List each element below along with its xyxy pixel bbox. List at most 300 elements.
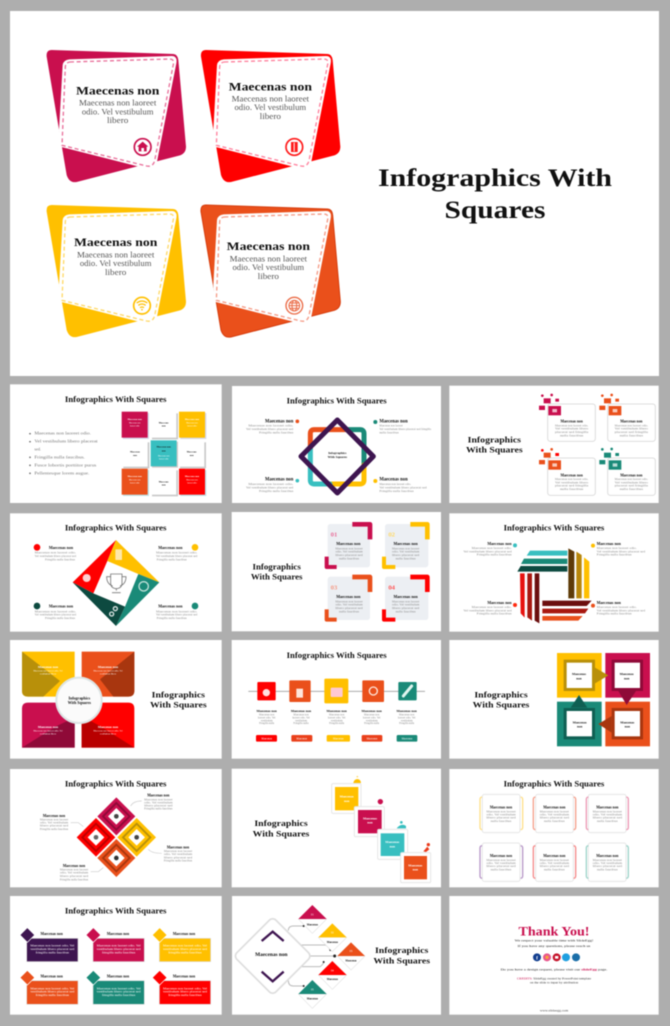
bullet list: Pellentesque lorem augue. — [34, 471, 89, 476]
icon: target — [139, 582, 148, 591]
small diamond: orange: Maecenas — [345, 960, 357, 963]
panel background — [232, 512, 441, 631]
labels: Maecenas non — [158, 545, 183, 550]
panel background — [449, 896, 659, 1015]
numbered card 04: nulla faucibus — [396, 610, 416, 613]
nested squares: Maecenas — [573, 720, 587, 724]
heading: With Squares — [473, 700, 530, 710]
large diamond — [234, 917, 312, 995]
box 02: fringilla nulla faucibus — [102, 951, 135, 954]
staircase cards — [332, 784, 431, 883]
card: yellow wifi: odio. Vel vestibulum — [80, 259, 152, 268]
labels: Maecenas non laoreet odio. — [472, 606, 512, 609]
numbered card 03: libero placerat sed — [335, 607, 364, 610]
cards and icons: placerat sed fringilla — [555, 485, 590, 488]
label: top right: nulla faucibus — [379, 432, 399, 435]
panel background — [232, 896, 441, 1015]
box 01: Maecenas non — [41, 932, 63, 936]
3x3 square grid: Maecenas non — [129, 423, 140, 425]
nested squares: Maecenas — [572, 672, 587, 676]
timeline labels: Fringilla nulla — [293, 722, 309, 725]
box 06 — [152, 970, 211, 1004]
quadrants: Maecenas non — [38, 725, 58, 729]
box 06: Maecenas non laoreet odio. Vel — [163, 987, 207, 990]
panel background — [449, 769, 659, 887]
panel background — [449, 513, 659, 632]
card: orange globe: Maecenas non — [227, 239, 310, 253]
heading: With Squares — [373, 956, 431, 966]
labels: Maecenas non laoreet odio. — [156, 552, 198, 555]
bracket card: pale yellow — [480, 794, 523, 833]
3x3 square grid: laoreet odio — [130, 483, 139, 485]
callouts: odio. Vel vestibulum — [40, 822, 69, 825]
cards and icons: Vel vestibulum libero — [555, 481, 589, 484]
3x3 square grid: Maecenas non — [158, 456, 169, 458]
small diamond: yellow — [318, 923, 347, 952]
bracket card: purple: Maecenas non laoreet — [486, 859, 516, 862]
label: bottom right: Fringilla nulla faucibus — [379, 490, 414, 493]
small diamond: red: Maecenas — [327, 978, 338, 981]
icon: trophy — [107, 574, 126, 593]
numbered card 04: Maecenas non — [394, 594, 419, 599]
numbered card 04: odio. Vel vestibulum — [392, 604, 420, 607]
bracket card: teal: Maecenas non — [596, 854, 618, 858]
woven stripes — [517, 548, 592, 623]
numbered card 02 — [384, 524, 428, 567]
panel: four cards with pixel icons — [449, 386, 659, 503]
labels: Fringilla nulla faucibus — [157, 617, 187, 620]
cards and icons — [539, 394, 655, 495]
panel background — [449, 640, 659, 759]
heading: Infographics With Squares — [287, 650, 387, 660]
box 03: vestibulum libero placerat sed — [163, 948, 208, 951]
card: yellow wifi: libero — [105, 268, 126, 277]
label: top right — [373, 419, 432, 435]
panel: branching diamonds — [232, 896, 441, 1015]
label: bottom left — [246, 478, 299, 493]
timeline labels: laoreet odio. Vel — [292, 717, 310, 720]
main slide background — [10, 11, 659, 376]
bullet list — [29, 431, 99, 476]
large diamond: Maecenas non — [255, 952, 288, 958]
icon: door — [286, 139, 303, 155]
cards and icons: Maecenas non laoreet odio. — [615, 478, 648, 481]
3x3 square grid: Maecenas — [159, 480, 169, 483]
numbered card 01: Maecenas non — [336, 541, 361, 546]
3x3 square grid: Maecenas non — [157, 446, 171, 449]
callouts: libero placerat sed — [40, 825, 69, 828]
bracket card: salmon — [533, 794, 576, 833]
timeline line and arrows — [248, 690, 425, 693]
timeline labels: laoreet odio. Vel — [363, 717, 381, 720]
labels: Fringilla nulla faucibus — [45, 558, 75, 561]
3x3 square grid: non — [133, 454, 138, 457]
timeline labels: Maecenas non — [362, 709, 382, 713]
numbered card 04 — [384, 577, 428, 620]
labels: Maecenas non — [597, 541, 622, 546]
bracket card: pale yellow: odio. Vel vestibulum — [486, 814, 517, 817]
heading: Infographics With Squares — [287, 395, 387, 405]
3x3 square grid: Maecenas non — [128, 418, 142, 421]
panel background — [449, 386, 659, 503]
callouts: odio. Vel vestibulum — [60, 872, 89, 875]
icon: wifi — [134, 297, 150, 314]
box 03: fringilla nulla faucibus — [168, 951, 202, 954]
timeline labels: Maecenas non — [291, 709, 311, 713]
box 04: fringilla nulla faucibus — [36, 994, 69, 997]
bullet list: Fringilla nulla faucibus. — [34, 455, 85, 460]
card: orange globe — [201, 205, 340, 337]
box 03 — [152, 928, 211, 962]
timeline labels: laoreet odio. Vel — [258, 717, 276, 720]
labels: Vel vestibulum libero placerat sed — [35, 614, 77, 617]
numbered card 04: libero placerat sed — [392, 607, 420, 610]
credits: on the slide to input by attribution — [530, 980, 579, 984]
heading: With Squares — [251, 572, 303, 582]
box 06: Maecenas non — [173, 974, 195, 978]
panel: numbered cards — [232, 512, 441, 631]
labels: Fringilla nulla faucibus — [157, 558, 187, 561]
cards and icons: nulla faucibus — [620, 488, 643, 491]
card: red door: Maecenas non — [229, 80, 312, 94]
panel: six numbered boxes — [10, 896, 222, 1015]
3x3 square grid — [122, 412, 206, 496]
3x3 square grid: Maecenas — [187, 451, 197, 454]
center circle: With Squares — [68, 700, 91, 705]
panel background — [232, 386, 441, 503]
nested squares: non — [576, 676, 582, 680]
numbered card 02: 02 — [388, 532, 396, 539]
bracket card: pink: libero placerat sed — [593, 817, 623, 820]
heading: Infographics With Squares — [504, 523, 605, 533]
panel: four quadrants with circle — [10, 640, 222, 759]
timeline labels: Maecenas non — [259, 714, 275, 717]
labels: Fringilla nulla faucibus — [477, 554, 512, 557]
label: bottom left: Maecenas non laoreet odio. — [248, 483, 294, 486]
timeline labels: vestibulum — [401, 719, 413, 722]
3x3 square grid: laoreet odio — [159, 459, 168, 461]
bracket card: teal: Maecenas non laoreet — [593, 859, 622, 862]
social icons: f — [536, 955, 538, 961]
social icons — [533, 953, 580, 961]
callouts: Fringilla nulla faucibus — [164, 860, 192, 863]
labels: Maecenas non laoreet odio. — [472, 547, 512, 550]
bracket card: red — [533, 843, 576, 881]
quadrants: Maecenas non laoreet odio. Vel — [33, 670, 63, 673]
bracket card: pink: nulla faucibus — [597, 820, 618, 823]
quadrants: Maecenas non — [98, 665, 118, 669]
bullet list: Fusce lobortis porttitor purus — [34, 463, 97, 468]
icon: gears — [110, 607, 117, 616]
callouts: Maecenas non laoreet — [60, 869, 88, 872]
thank you title: Thank You! — [518, 925, 589, 939]
small diamond: green: 05 — [311, 989, 314, 992]
box 04: vestibulum libero placerat sed — [30, 991, 75, 994]
labels: Vel vestibulum libero placerat sed — [463, 609, 513, 612]
bracket card: red: odio. Vel vestibulum — [540, 862, 570, 865]
timeline pills: Maecenas — [296, 737, 307, 740]
icon: home — [134, 139, 151, 155]
callouts: Maecenas non laoreet — [144, 798, 173, 801]
3x3 square grid: laoreet odio — [187, 426, 197, 428]
label: top right: Maecenas non laoreet — [379, 425, 403, 428]
bracket card: purple: odio. Vel vestibulum — [486, 862, 517, 865]
numbered card 03: Maecenas non — [336, 594, 361, 599]
box 01: fringilla nulla faucibus — [36, 951, 69, 954]
cards and icons: Vel vestibulum libero — [615, 428, 649, 431]
numbered card 01: odio. Vel vestibulum — [335, 551, 364, 554]
card: crimson home: odio. Vel vestibulum — [82, 107, 154, 116]
heading — [473, 689, 530, 710]
quadrants: vestibulum libero — [100, 733, 117, 736]
panel: four diamonds — [10, 769, 222, 887]
staircase cards: non — [390, 844, 395, 848]
bracket card: teal: nulla faucibus — [597, 868, 618, 871]
timeline pills: Maecenas — [402, 737, 412, 740]
box 05: Maecenas non — [107, 974, 129, 978]
3x3 square grid: Maecenas non — [185, 418, 200, 421]
numbered card 01: libero placerat sed — [335, 554, 364, 557]
panel background — [232, 769, 441, 887]
card: orange globe: libero — [258, 272, 279, 281]
cards and icons: Maecenas non laoreet odio. — [615, 424, 648, 427]
timeline labels: Maecenas non — [293, 714, 309, 717]
labels: Maecenas non — [158, 604, 183, 609]
bracket card: red: nulla faucibus — [544, 868, 565, 871]
labels: Vel vestibulum libero placerat sed — [463, 550, 513, 553]
connectors — [288, 925, 336, 987]
labels: Maecenas non laoreet odio. — [597, 606, 637, 609]
heading: Infographics With Squares — [65, 523, 167, 533]
labels: Maecenas non — [597, 600, 622, 605]
diamond cluster — [77, 797, 156, 877]
bracket card: pink — [586, 794, 628, 833]
numbered card 02: nulla faucibus — [396, 557, 416, 560]
bullet list: Maecenas non laoreet odio. — [34, 431, 91, 436]
card: red door: odio. Vel vestibulum — [234, 103, 307, 112]
interlocked square diagram: With Squares — [328, 455, 348, 459]
box 06: fringilla nulla faucibus — [168, 994, 202, 997]
panel: interlocked squares — [232, 386, 441, 503]
bracket card: teal — [586, 843, 628, 881]
small diamond: crimson — [298, 905, 327, 933]
callouts: Maecenas non — [43, 814, 65, 818]
bracket card: teal: libero placerat sed — [593, 865, 623, 868]
small diamond: red — [318, 961, 347, 989]
panel: main slide — [10, 11, 659, 376]
panel background — [10, 384, 222, 503]
bracket card: salmon: Maecenas non laoreet — [540, 811, 569, 814]
card: orange globe: Maecenas non laoreet — [230, 254, 308, 263]
bracket card: red: libero placerat sed — [540, 865, 570, 868]
labels: Vel vestibulum libero placerat sed — [35, 555, 77, 558]
heading: With Squares — [150, 700, 207, 710]
timeline labels: Maecenas non — [399, 714, 415, 717]
box 02: Maecenas non — [107, 932, 129, 936]
quadrants — [22, 652, 134, 748]
bracket card: pink: Maecenas non — [596, 806, 618, 810]
nested squares: Maecenas — [620, 720, 635, 724]
icon: head — [83, 574, 91, 582]
cards and icons: nulla faucibus — [560, 488, 583, 491]
label: bottom right: Maecenas non laoreet odio. — [379, 483, 411, 486]
cards and icons: placerat sed fringilla — [615, 431, 649, 434]
quadrants: vestibulum libero — [40, 673, 57, 676]
numbered card 02: libero placerat sed — [392, 554, 420, 557]
credits: CREDITS: SlideEgg created by PowerPoint template — [517, 977, 592, 981]
panel: grid of squares — [10, 384, 222, 503]
bracket card: pale yellow: libero placerat sed — [486, 817, 517, 820]
panel: timeline icons — [232, 640, 441, 759]
icon: globe — [286, 297, 303, 314]
heading: Infographics — [254, 818, 308, 828]
design request line: Do you have a design request, please visit our slideEgg page. — [501, 968, 608, 973]
labels: Maecenas non laoreet odio. — [597, 547, 637, 550]
heading: Infographics — [152, 689, 206, 699]
bracket card: pale yellow: Maecenas non laoreet — [486, 811, 516, 814]
card: crimson home: libero — [107, 116, 128, 125]
heading — [150, 689, 207, 710]
heading: Infographics — [375, 945, 429, 955]
box 04 — [20, 970, 78, 1004]
label: top left: Fringilla nulla faucibus — [259, 432, 293, 435]
cards and icons: Maecenas non laoreet odio. — [555, 478, 589, 481]
panel background — [232, 640, 441, 759]
staircase cards: Maecenas — [385, 840, 400, 844]
timeline labels — [257, 709, 417, 725]
3x3 square grid: Maecenas non — [185, 475, 200, 478]
panel background — [10, 513, 222, 632]
timeline labels: Maecenas non — [397, 709, 417, 713]
numbered card 01: Maecenas non laoreet — [335, 547, 363, 550]
website: www.slideegg.com — [540, 1009, 569, 1013]
3x3 square grid: Maecenas — [159, 421, 169, 424]
bracket card: purple: libero placerat sed — [486, 865, 517, 868]
box 01: vestibulum libero placerat sed — [30, 948, 75, 951]
numbered card 04: 04 — [388, 584, 396, 591]
staircase icons — [353, 776, 430, 852]
panel: staircase squares — [232, 769, 441, 887]
timeline labels: vestibulum — [366, 719, 378, 722]
cards and icons: nulla faucibus — [620, 434, 643, 437]
label: top left: Vel vestibulum libero placerat sed — [246, 428, 294, 431]
heading: With Squares — [466, 445, 523, 455]
box 06: vestibulum libero placerat sed — [163, 991, 208, 994]
heading: Infographics — [468, 434, 522, 444]
callouts: Fringilla nulla faucibus — [60, 878, 88, 881]
callouts: Maecenas non laoreet — [40, 819, 68, 822]
timeline labels: Fringilla nulla — [329, 722, 345, 725]
box 01: Maecenas non laoreet odio. Vel — [30, 945, 75, 948]
cards and icons: Maecenas non — [620, 473, 642, 477]
heading: Infographics With Squares — [65, 778, 167, 788]
small diamond: green: Maecenas — [307, 997, 318, 1000]
bullet list: sed. — [34, 447, 41, 452]
cards and icons: placerat sed fringilla — [615, 485, 649, 488]
card: yellow wifi — [47, 205, 186, 337]
numbered card 03: odio. Vel vestibulum — [335, 604, 364, 607]
bracket card: pale yellow: nulla faucibus — [491, 820, 511, 823]
labels: Maecenas non — [49, 545, 74, 550]
cards and icons: nulla faucibus — [560, 434, 583, 437]
interlocked square diagram: Infographics — [328, 451, 347, 455]
heading — [466, 434, 523, 455]
heading — [373, 945, 431, 966]
card: red door: Maecenas non laoreet — [232, 94, 310, 103]
icon: document — [115, 549, 122, 560]
panel background — [10, 769, 222, 887]
labels: Maecenas non — [49, 604, 74, 609]
labels — [463, 541, 646, 616]
labels: Maecenas non laoreet odio. — [35, 552, 76, 555]
callouts: odio. Vel vestibulum — [144, 801, 174, 804]
nested squares — [557, 653, 650, 746]
numbered card 04: Maecenas non laoreet — [392, 600, 420, 603]
staircase cards: Maecenas — [408, 863, 423, 867]
small diamond: yellow: Maecenas — [327, 941, 338, 944]
timeline labels: Maecenas non — [329, 714, 345, 717]
cards and icons: Vel vestibulum libero — [555, 428, 589, 431]
quadrants: Maecenas non — [98, 725, 118, 729]
label: bottom left: Vel vestibulum libero placerat sed — [246, 486, 294, 489]
label: top left: Maecenas non laoreet odio. — [248, 425, 294, 428]
labels: Maecenas non — [487, 541, 512, 546]
panel background — [10, 896, 222, 1015]
bullet list: Vel vestibulum libero placerat — [34, 439, 99, 444]
numbered card 03: Maecenas non laoreet — [335, 600, 363, 603]
numbered card 03: nulla faucibus — [339, 610, 359, 613]
box 05: Maecenas non laoreet odio. Vel — [97, 987, 141, 990]
label: bottom left: Fringilla nulla faucibus — [259, 490, 293, 493]
labels: Maecenas non — [487, 600, 512, 605]
bracket card: teal: odio. Vel vestibulum — [593, 862, 623, 865]
labels: Maecenas non laoreet odio. — [35, 610, 76, 613]
staircase cards: Maecenas — [363, 816, 378, 820]
label: top right: Vel vestibulum libero placerat sed fringilla — [379, 428, 432, 431]
bracket card: purple: Maecenas non — [490, 854, 512, 858]
3x3 square grid: laoreet odio — [187, 483, 197, 485]
timeline labels: vestibulum — [331, 719, 343, 722]
card: yellow wifi: Maecenas non laoreet — [77, 250, 155, 259]
message: We respect your valuable time with SlideEgg! — [515, 939, 593, 943]
card: orange globe: odio. Vel vestibulum — [232, 263, 305, 272]
numbered card 02: Maecenas non laoreet — [392, 547, 420, 550]
main title: Infographics With — [378, 165, 612, 192]
callouts: libero placerat sed — [164, 856, 193, 859]
heading — [251, 562, 303, 582]
3x3 square grid: non — [162, 484, 166, 487]
box 02 — [86, 928, 144, 962]
card: red door — [201, 50, 340, 182]
timeline pills: Maecenas — [333, 737, 344, 740]
3x3 square grid: Maecenas non — [128, 475, 142, 478]
timeline pills: Maecenas — [367, 737, 377, 740]
box 05 — [86, 970, 144, 1004]
heading: Infographics With Squares — [65, 906, 167, 916]
callouts: Maecenas non — [63, 864, 85, 868]
label: bottom right: Maecenas non — [379, 478, 408, 483]
numbered card 01 — [327, 524, 370, 567]
timeline pills: Maecenas — [261, 737, 272, 740]
bracket card: salmon: Maecenas non — [543, 806, 565, 810]
small diamond: yellow: 02 — [331, 932, 334, 935]
numbered card 01: 01 — [331, 532, 337, 539]
callouts: Maecenas non — [167, 845, 189, 849]
box 03: Maecenas non — [173, 932, 195, 936]
cards and icons: placerat sed fringilla — [555, 431, 590, 434]
numbered card 03 — [327, 577, 370, 620]
small diamond: crimson: 01 — [311, 913, 314, 916]
